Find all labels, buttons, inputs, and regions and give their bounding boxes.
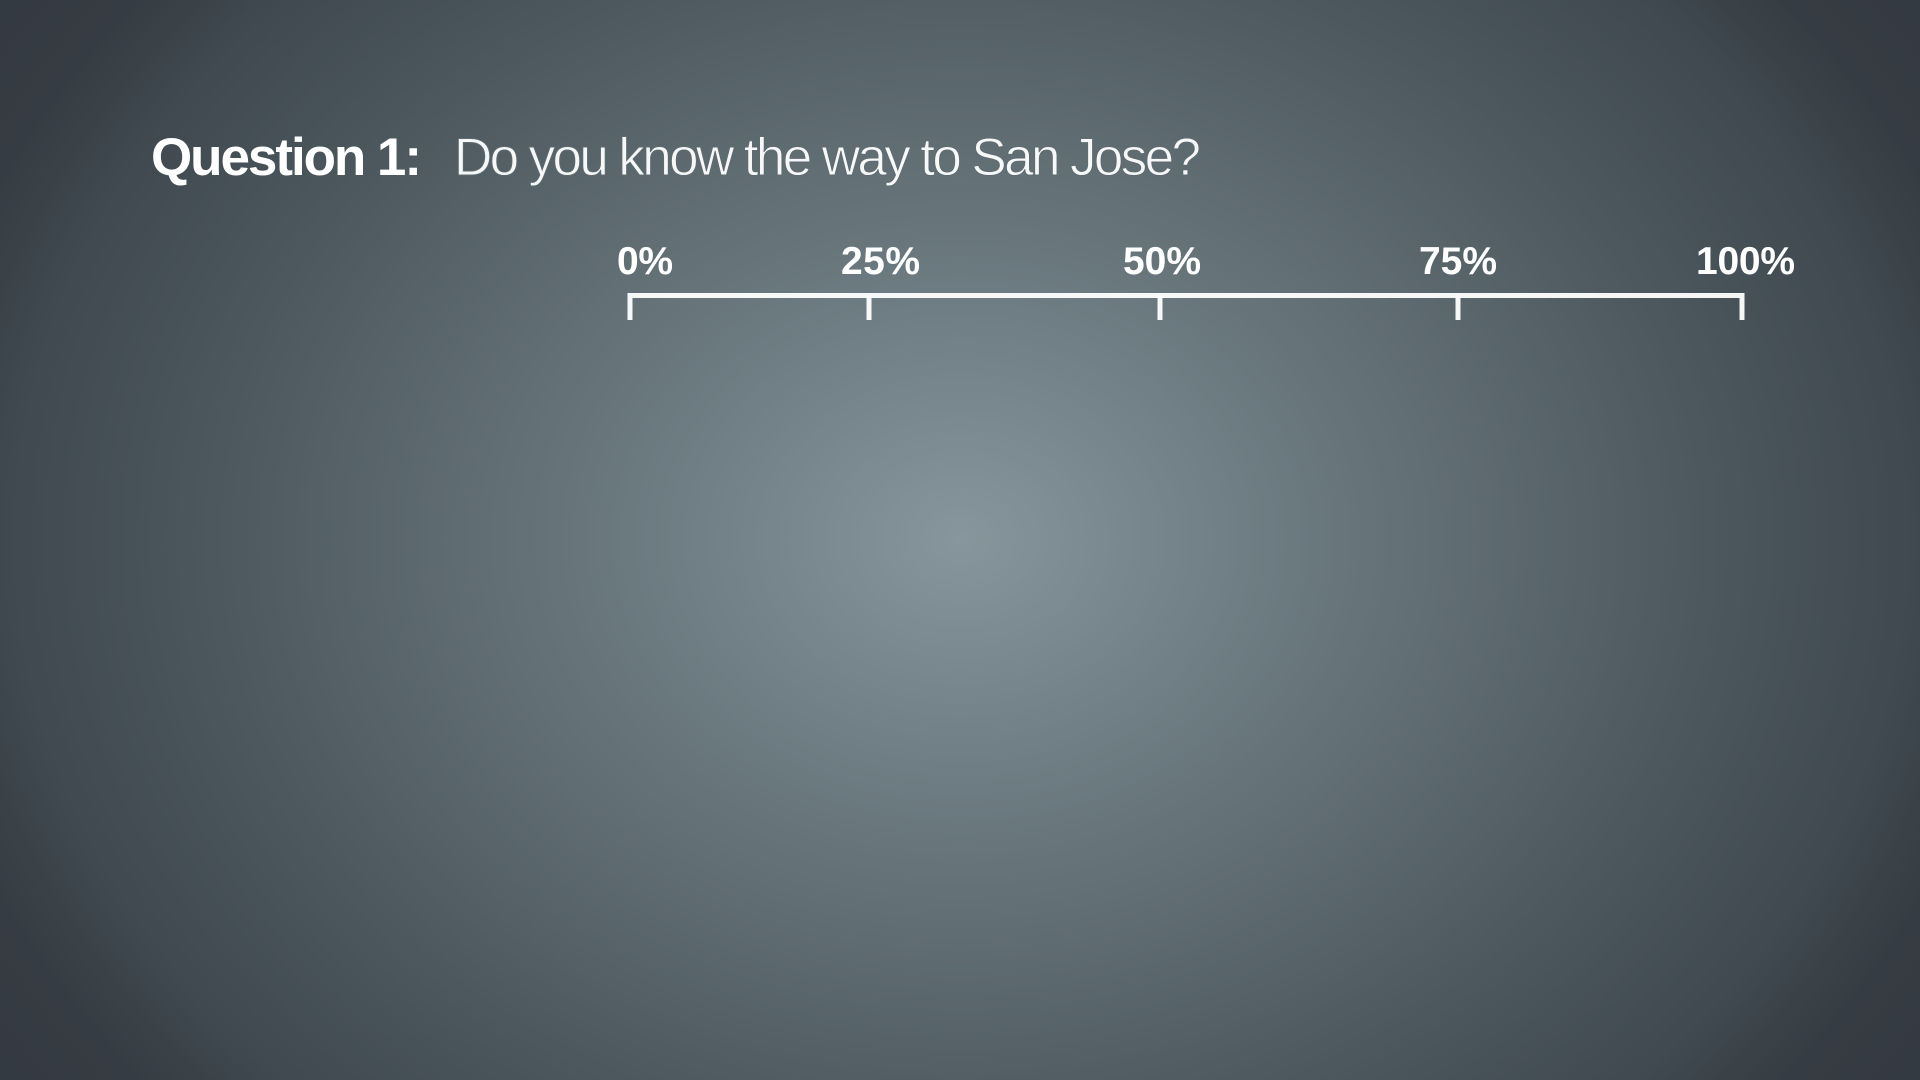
axis labels: 100% bbox=[1696, 240, 1795, 283]
axis labels bbox=[617, 240, 1795, 283]
axis labels: 0% bbox=[617, 240, 673, 283]
axis labels: 75% bbox=[1419, 240, 1497, 283]
axis labels: 25% bbox=[841, 240, 920, 283]
percentage scale axis bbox=[617, 240, 1795, 320]
question text: Do you know the way to San Jose? bbox=[454, 128, 1201, 187]
axis labels: 50% bbox=[1123, 240, 1201, 283]
title label: Question 1: bbox=[151, 128, 422, 187]
axis line and ticks bbox=[630, 296, 1742, 320]
title: question 1 bbox=[151, 128, 1201, 187]
